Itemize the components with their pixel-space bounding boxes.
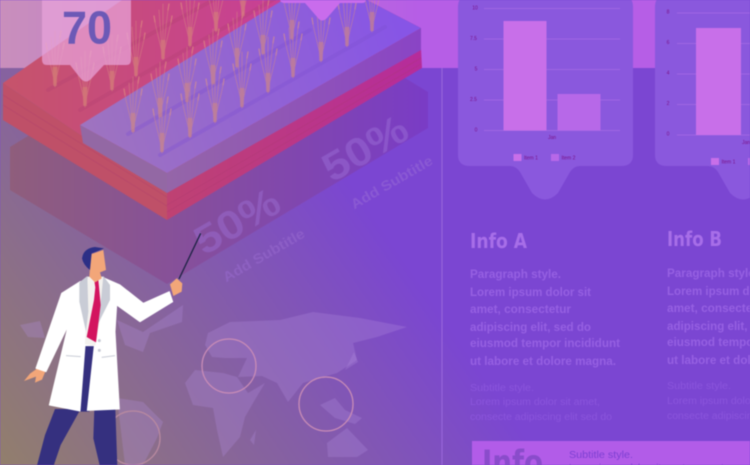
subtitle: Subtitle style. <box>667 381 731 392</box>
top band <box>0 0 750 68</box>
axis labels <box>667 10 750 146</box>
legend: Item 1 <box>722 160 736 166</box>
map: Australia <box>327 428 368 457</box>
left hand <box>24 368 45 383</box>
soil left side <box>3 83 167 220</box>
paragraph: amet, consectetur <box>470 302 571 316</box>
subtitle: consecte adipiscing elit sed do <box>470 412 612 423</box>
subtitle: Subtitle style. <box>470 383 534 394</box>
tie <box>87 280 101 342</box>
isometric field platform <box>3 0 422 220</box>
scientist <box>24 233 201 465</box>
coat pockets and buttons <box>66 339 115 357</box>
axis labels: 8 <box>667 10 670 16</box>
front leg <box>93 409 117 465</box>
paragraph: eiusmod tempor incididunt <box>470 336 620 350</box>
legend <box>514 154 576 162</box>
axis labels: 0 <box>667 132 670 138</box>
callout bubble top right <box>280 0 366 20</box>
axis labels: 2.5 <box>470 97 477 103</box>
axis labels: 6 <box>667 40 670 46</box>
pointer stick <box>179 233 201 279</box>
map: Africa <box>185 370 265 457</box>
map: Indonesia and Japan <box>250 352 362 445</box>
neck and face <box>89 250 106 282</box>
shadow label 50% right <box>314 104 436 215</box>
subtitle: Lorem ipsum dolor sit amet, <box>470 397 600 408</box>
shadow label 50% right: 50% <box>314 107 416 191</box>
crop bed left side <box>80 125 167 193</box>
map marker ring: Europe <box>202 339 256 393</box>
subtitle <box>470 383 612 423</box>
box subtitle: Subtitle style. <box>569 450 633 461</box>
axis labels: Jan <box>742 140 750 146</box>
shadow label 50% left: 50% <box>186 180 288 264</box>
bar item 1 <box>696 28 741 135</box>
crop bed right side <box>167 28 421 193</box>
plants <box>46 0 381 153</box>
shirt <box>85 277 104 346</box>
gridlines <box>677 13 750 135</box>
furrows <box>48 0 385 155</box>
map: South America <box>117 398 163 465</box>
soil top <box>3 0 421 193</box>
callout bubble 70: 70 <box>62 2 112 54</box>
panel shape <box>655 0 750 200</box>
axis labels: 5 <box>475 66 478 72</box>
map: Eurasia <box>205 312 407 402</box>
paragraph <box>667 266 750 367</box>
chart panel A <box>458 0 633 200</box>
panel shape <box>458 0 633 200</box>
gridlines <box>484 8 620 130</box>
subtitle <box>667 381 750 422</box>
right hand <box>170 278 182 296</box>
hair <box>82 247 104 270</box>
world map <box>20 305 407 465</box>
paragraph: ut labore et dolore magna. <box>470 354 616 368</box>
bottom info box <box>472 441 750 465</box>
axis labels <box>470 6 556 141</box>
axis labels: 7.5 <box>470 36 477 42</box>
right lapel <box>97 276 110 327</box>
map marker ring: Southeast Asia <box>299 377 353 431</box>
soil right side <box>167 48 422 220</box>
paragraph: adipiscing elit, sed do <box>470 320 591 334</box>
bar item 1 <box>504 21 546 130</box>
legend: Item 1 <box>524 156 538 162</box>
left lapel <box>79 276 88 332</box>
paragraph: Lorem ipsum dolor sit <box>470 285 591 299</box>
back leg <box>37 409 81 465</box>
shadow label 50% left <box>186 177 308 288</box>
map: North America <box>117 305 183 352</box>
axis labels: 10 <box>472 6 478 12</box>
chart panel B <box>655 0 750 200</box>
crop bed top <box>80 0 421 173</box>
map: Greenland area <box>20 321 45 338</box>
axis labels: 0 <box>475 128 478 134</box>
lab coat <box>36 278 173 411</box>
platform shadow <box>10 78 428 284</box>
legend: Item 2 <box>562 156 576 162</box>
text column: Info A <box>470 229 620 423</box>
axis labels: Jan <box>548 135 556 141</box>
callout bubble 70 <box>42 0 131 82</box>
shadow label 50% left: Add Subtitle <box>220 225 308 285</box>
heading: Info A <box>470 229 527 253</box>
paragraph: Paragraph style. <box>470 267 561 281</box>
legend <box>711 158 750 166</box>
map marker ring: South America <box>106 411 160 465</box>
axis labels: 4 <box>667 70 670 76</box>
trousers centre <box>79 345 95 412</box>
shadow label 50% right: Add Subtitle <box>348 152 436 212</box>
column divider <box>442 68 443 465</box>
text column: Info B <box>667 227 750 422</box>
paragraph <box>470 267 620 368</box>
axis labels: 2 <box>667 101 670 107</box>
bar item 2 <box>558 94 600 130</box>
heading: Info B <box>667 227 722 251</box>
soil strata lines <box>3 58 421 212</box>
